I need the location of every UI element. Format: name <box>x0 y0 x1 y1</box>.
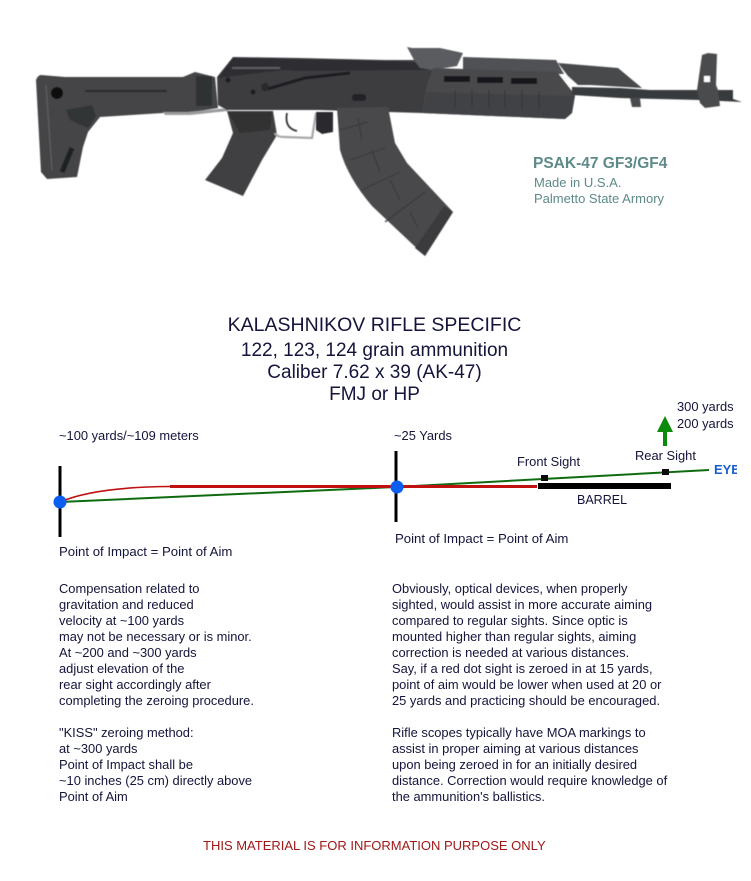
text block: optics <box>392 581 668 804</box>
text block: compensation: Point of Aim <box>59 789 128 804</box>
impact point: 25 yards <box>390 480 404 494</box>
text block: compensation: may not be necessary or is minor. <box>59 629 252 644</box>
target line: 100 yards <box>58 466 62 537</box>
caption: rifle model <box>533 155 668 206</box>
text block: optics: assist in proper aiming at various distances <box>392 741 638 756</box>
arrow: elevation adjustment <box>657 416 673 446</box>
line of sight <box>60 470 709 502</box>
label: rear sight: Rear Sight <box>635 448 696 463</box>
text block: compensation <box>59 581 254 804</box>
text block: compensation: At ~200 and ~300 yards <box>59 645 197 660</box>
label: barrel: BARREL <box>577 493 627 507</box>
label: 300 yards: 300 yards <box>677 399 734 414</box>
text block: optics: Say, if a red dot sight is zeroed in at 15 yards, <box>392 661 653 676</box>
handguard <box>422 68 575 119</box>
text block: compensation: "KISS" zeroing method: <box>59 725 194 740</box>
text block: optics: the ammunition's ballistics. <box>392 789 545 804</box>
barrel <box>538 483 671 489</box>
label: front sight: Front Sight <box>517 454 580 469</box>
rear sight <box>662 469 669 475</box>
text block: compensation: velocity at ~100 yards <box>59 613 184 628</box>
text block: optics: point of aim would be lower when used at 20 or <box>392 677 661 692</box>
rear sight <box>407 47 463 70</box>
text block: optics: compared to regular sights. Since optic is <box>392 613 628 628</box>
impact point: 100 yards <box>54 496 66 508</box>
text block: compensation: Point of Impact shall be <box>59 757 193 772</box>
title: KALASHNIKOV RIFLE SPECIFIC <box>228 314 521 336</box>
icon: rifle photo illustration <box>35 46 742 257</box>
text block: compensation: at ~300 yards <box>59 741 137 756</box>
text block: optics: Obviously, optical devices, when properly <box>392 581 628 596</box>
stock details <box>51 87 63 99</box>
caption: rifle model: Made in U.S.A. <box>534 175 621 190</box>
subtitle: FMJ or HP <box>329 384 420 405</box>
subtitle: Caliber 7.62 x 39 (AK-47) <box>267 362 482 383</box>
text block: optics: upon being zeroed in for an initially desired <box>392 757 637 772</box>
label: 100 yards: ~100 yards/~109 meters <box>59 428 199 443</box>
subtitle: 122, 123, 124 grain ammunition <box>241 340 508 361</box>
text block: optics: sighted, would assist in more accurate aiming <box>392 597 652 612</box>
trigger guard <box>275 113 316 138</box>
gas tube <box>463 57 564 74</box>
text block: compensation: Compensation related to <box>59 581 199 596</box>
text block: compensation: adjust elevation of the <box>59 661 184 676</box>
text block: compensation: gravitation and reduced <box>59 597 194 612</box>
front sight <box>697 53 720 108</box>
caption: rifle model: PSAK-47 GF3/GF4 <box>533 155 667 172</box>
front sight <box>541 475 548 481</box>
label: 25 yards: ~25 Yards <box>394 428 452 443</box>
receiver details <box>264 73 350 90</box>
text block: optics: distance. Correction would require knowledge of <box>392 773 667 788</box>
text block: compensation: completing the zeroing procedure. <box>59 693 254 708</box>
label: 200 yards: 200 yards <box>677 416 734 431</box>
barrel <box>572 87 742 102</box>
text block: optics: correction is needed at various distances. <box>392 645 629 660</box>
label: point of impact right: Point of Impact = Point of Aim <box>395 531 568 546</box>
caption: rifle model: Palmetto State Armory <box>534 191 664 206</box>
text block: compensation: ~10 inches (25 cm) directly above <box>59 773 252 788</box>
text block: compensation: rear sight accordingly after <box>59 677 211 692</box>
target line: 25 yards <box>394 451 398 522</box>
subtitle <box>241 340 508 405</box>
grip <box>205 111 277 196</box>
gas block <box>558 63 642 88</box>
disclaimer: THIS MATERIAL IS FOR INFORMATION PURPOSE ONLY <box>203 838 546 853</box>
stock <box>36 72 218 179</box>
text block: optics: Rifle scopes typically have MOA markings to <box>392 725 646 740</box>
text block: optics: 25 yards and practicing should be encouraged. <box>392 693 660 708</box>
text block: optics: mounted higher than regular sights, aiming <box>392 629 636 644</box>
bullet trajectory <box>60 486 170 502</box>
receiver <box>217 57 433 113</box>
magazine <box>337 107 453 256</box>
label: point of impact left: Point of Impact = Point of Aim <box>59 544 232 559</box>
